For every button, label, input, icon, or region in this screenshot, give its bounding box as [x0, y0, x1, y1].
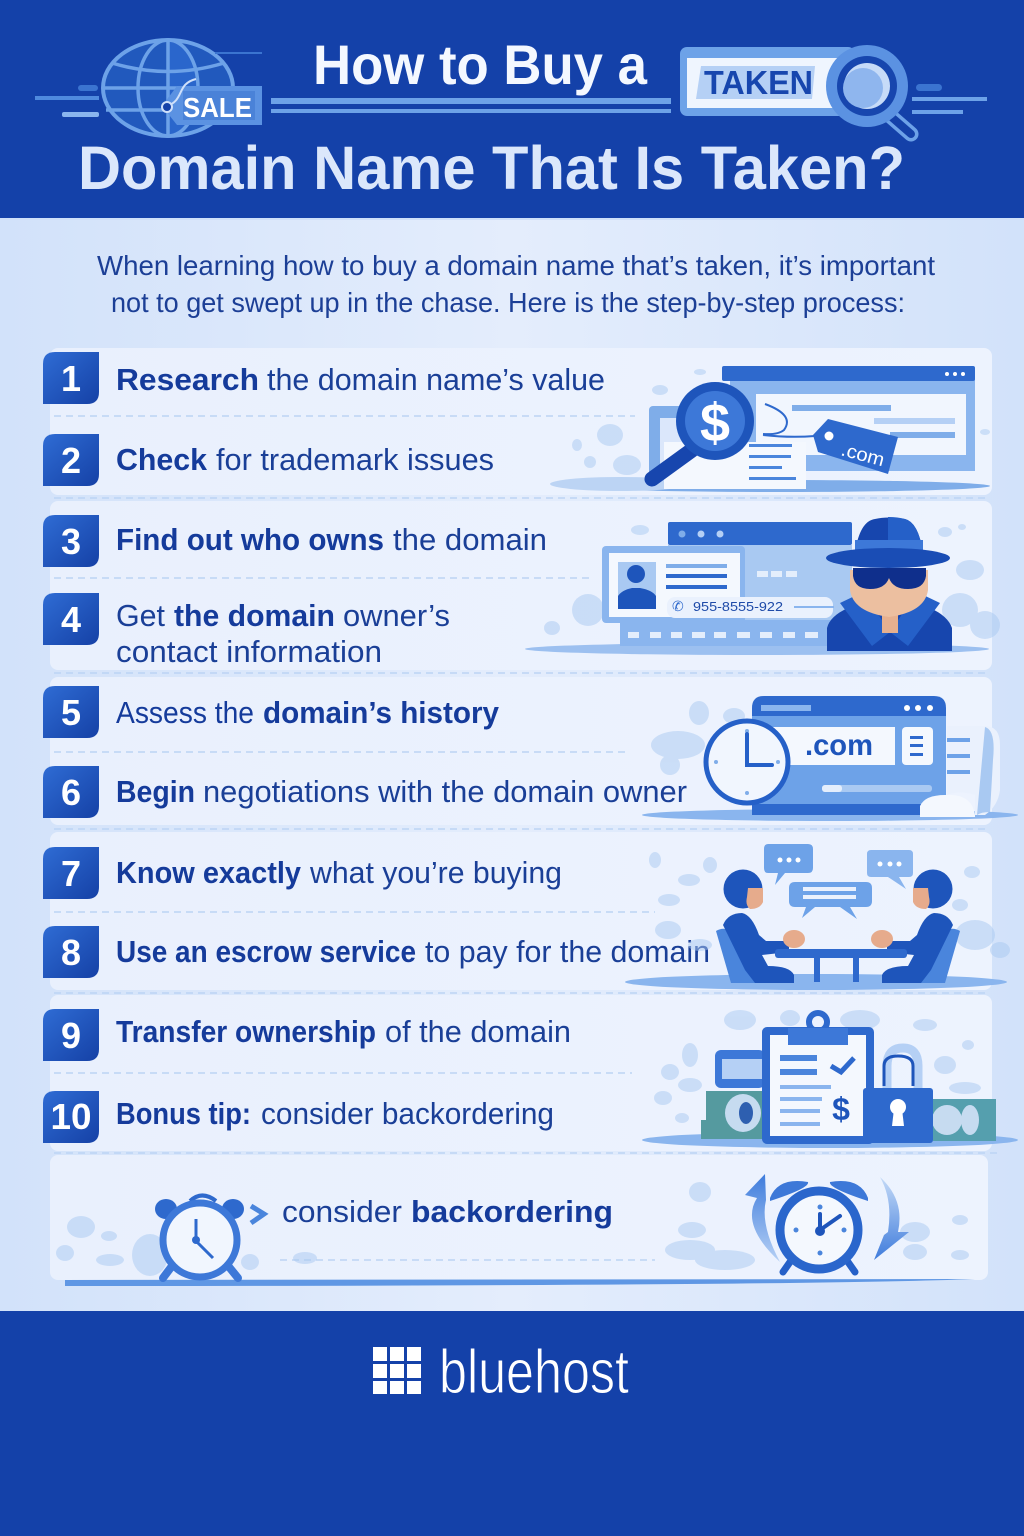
step 10: consider backordering — [261, 1096, 554, 1131]
detective figure — [826, 517, 952, 651]
icon: chevron — [251, 1206, 264, 1223]
step 4 — [43, 593, 450, 669]
icon: small alarm clock — [155, 1196, 244, 1278]
illustration: two people negotiating — [625, 844, 1010, 990]
illustration: domain value with magnifier and tag: $ — [700, 393, 730, 453]
step 1: 1 — [61, 358, 81, 399]
step 2: 2 — [61, 440, 81, 481]
step 9: Transfer ownership — [116, 1014, 376, 1049]
padlock — [863, 1048, 933, 1143]
table — [775, 949, 907, 982]
left person — [716, 870, 805, 983]
right person — [871, 870, 960, 983]
clipboard — [762, 1013, 874, 1144]
step 5: 5 — [61, 692, 81, 733]
step 10 — [43, 1091, 554, 1143]
illustration: detective and contact card: ✆ — [672, 598, 684, 614]
step 3: the domain — [393, 522, 547, 557]
illustration: domain history clock and browser — [642, 696, 1018, 821]
bluehost logo grid — [373, 1347, 421, 1394]
step 5 — [43, 686, 500, 738]
step 5: domain’s history — [263, 695, 500, 730]
panel: steps 7 and 8 — [43, 832, 1010, 993]
step 3: 3 — [61, 521, 81, 562]
step 9: 9 — [61, 1015, 81, 1056]
illustration: checklist, money and padlock — [642, 1010, 1018, 1148]
icon: taken search bar with magnifier — [680, 45, 987, 134]
intro text — [97, 250, 935, 318]
footer band — [0, 1311, 1024, 1536]
illustration: domain history clock and browser: .com — [805, 729, 873, 762]
step 5: Assess the — [116, 695, 254, 730]
text: consider backordering: consider — [282, 1194, 402, 1229]
bluehost wordmark: bluehost — [439, 1338, 629, 1407]
step 8: to pay for the domain — [425, 934, 710, 969]
step 10: 10 — [50, 1096, 92, 1137]
text: consider backordering — [282, 1194, 613, 1229]
double rule — [271, 98, 671, 113]
step 1: Research — [116, 362, 259, 397]
step 7: 7 — [61, 853, 81, 894]
step 6: Begin — [116, 774, 195, 809]
step 8: 8 — [61, 932, 81, 973]
step 4: Get — [116, 598, 165, 633]
header banner — [0, 0, 1024, 220]
title line 2: Domain Name That Is Taken? — [78, 134, 905, 202]
speech bubbles — [764, 844, 913, 919]
step 7: what you’re buying — [309, 855, 562, 890]
intro text: not to get swept up in the chase. Here is the step-by-step process: — [111, 287, 905, 318]
step 4: contact information — [116, 634, 382, 669]
step 8: Use an escrow service — [116, 934, 416, 969]
text: consider backordering: backordering — [411, 1194, 613, 1229]
step 2: Check — [116, 442, 208, 477]
step 6: 6 — [61, 772, 81, 813]
title line 1: How to Buy a — [313, 33, 648, 96]
step 4: the domain — [174, 598, 335, 633]
step 1 — [43, 352, 605, 404]
step 10: Bonus tip: — [116, 1096, 251, 1131]
panel: steps 3 and 4 — [43, 501, 1000, 673]
step 3: Find out who owns — [116, 522, 384, 557]
intro text: When learning how to buy a domain name that’s taken, it’s important — [97, 250, 935, 281]
step 9 — [43, 1009, 571, 1061]
icon: globe with sale tag — [35, 40, 262, 136]
panel: steps 9 and 10 — [43, 995, 1018, 1153]
illustration: domain value with magnifier and tag: .com — [839, 440, 887, 471]
step 9: of the domain — [385, 1014, 571, 1049]
clipboard: $ — [832, 1091, 850, 1127]
panel: steps 1 and 2 — [43, 348, 992, 498]
icon: globe with sale tag: SALE — [183, 92, 252, 123]
icon: taken search bar with magnifier: TAKEN — [704, 64, 813, 101]
step 2 — [43, 434, 494, 486]
step 7 — [43, 847, 562, 899]
illustration: domain value with magnifier and tag — [550, 366, 990, 492]
panel: bonus backordering — [50, 1155, 988, 1286]
step 3 — [43, 515, 547, 567]
illustration: detective and contact card — [525, 517, 1000, 655]
step 6 — [43, 766, 687, 818]
step 6: negotiations with the domain owner — [203, 774, 687, 809]
step 8 — [43, 926, 710, 978]
step 2: for trademark issues — [216, 442, 494, 477]
step 4: 4 — [61, 599, 81, 640]
clock — [706, 721, 788, 803]
step 7: Know exactly — [116, 855, 302, 890]
step 4: owner’s — [343, 598, 450, 633]
ground shadow — [65, 1279, 975, 1286]
step 1: the domain name’s value — [267, 362, 605, 397]
icon: alarm clock with cycle arrows — [745, 1174, 909, 1272]
panel: steps 5 and 6 — [43, 677, 1018, 829]
illustration: detective and contact card: 955-8555-922 — [693, 599, 783, 614]
